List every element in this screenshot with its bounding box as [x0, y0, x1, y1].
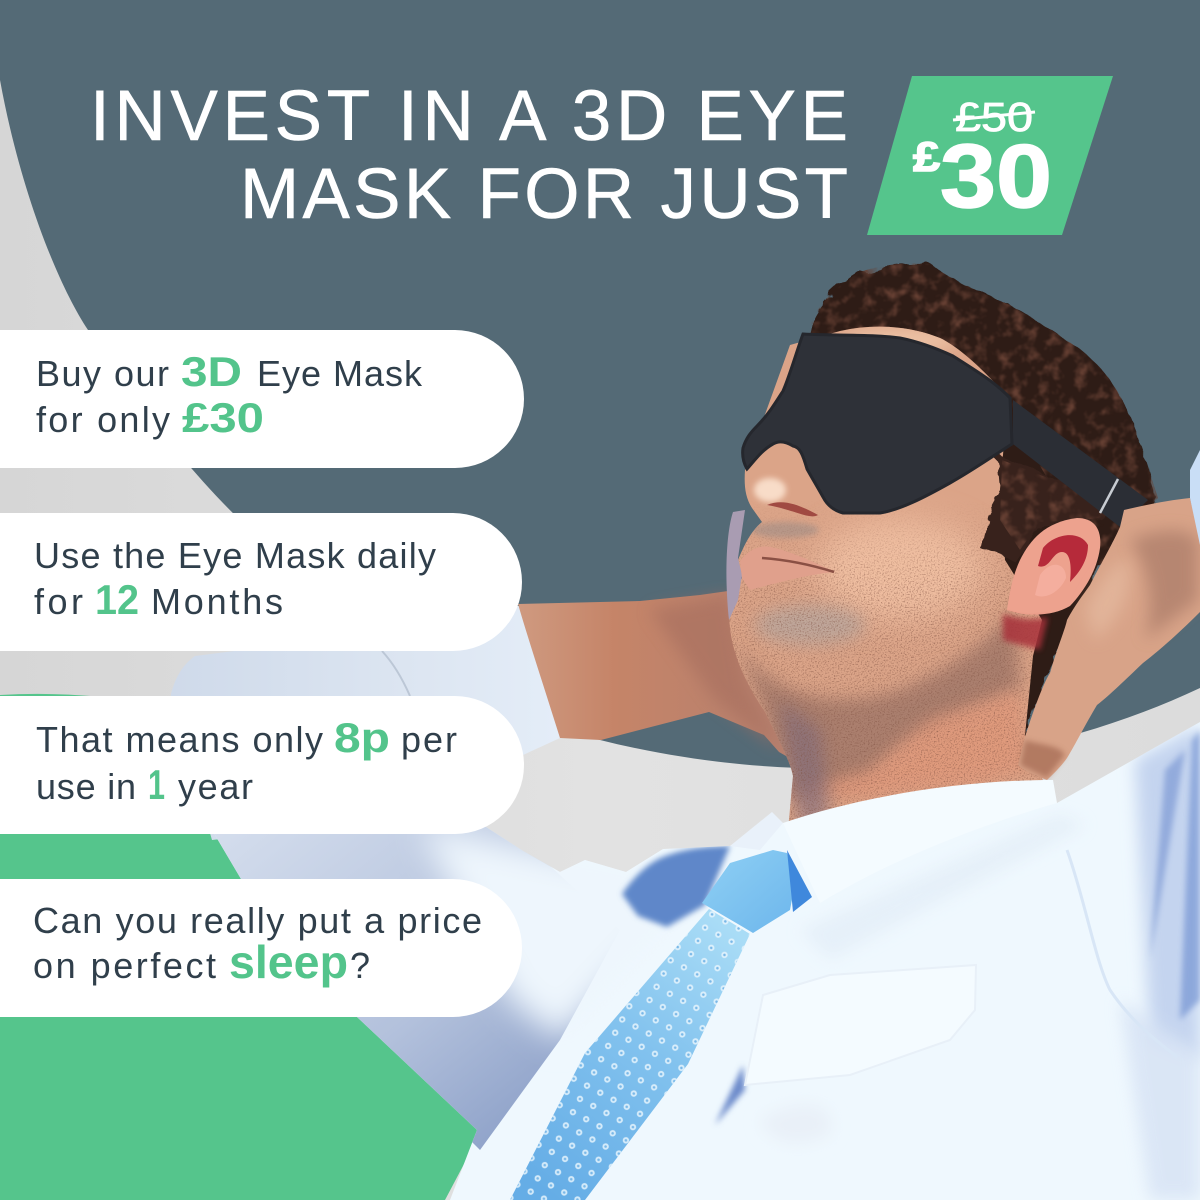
text: step 3: year — [178, 766, 253, 807]
text: step 2 — [34, 535, 436, 623]
text: step 4 — [33, 900, 482, 988]
text: step 3: use in — [36, 766, 136, 807]
price badge — [867, 76, 1113, 235]
text: step 4: sleep — [229, 936, 348, 988]
strikethrough — [953, 112, 1035, 120]
hair curls — [808, 263, 1158, 565]
right sleeve stripes — [1135, 725, 1200, 1060]
title: INVEST IN A 3D EYE — [90, 77, 848, 156]
sleeve underside — [214, 827, 596, 1150]
right hand and wrist — [1018, 498, 1200, 780]
sideburn curls — [1000, 460, 1135, 550]
new price: £ — [913, 133, 940, 180]
lips — [740, 547, 835, 590]
text: step 1: Buy our — [36, 353, 169, 394]
text: step 2: 12 — [95, 576, 139, 623]
blue shadow near collar — [622, 846, 730, 927]
text: step 1 — [36, 348, 423, 441]
collar left flap — [730, 812, 783, 850]
arm shading — [650, 595, 780, 750]
text: step 2: Months — [151, 581, 283, 622]
hand shading — [1130, 531, 1198, 640]
text: step 3: 8p — [334, 714, 390, 761]
shirt folds — [715, 1065, 745, 1125]
text: step 1: 3D — [181, 348, 242, 395]
panel: step 4 — [0, 879, 522, 1017]
text: step 3: per — [401, 719, 457, 760]
old price: £50 — [955, 94, 1033, 140]
sideburn hair — [980, 455, 1140, 562]
tie blade — [510, 909, 750, 1200]
face highlights and shadow — [815, 520, 985, 620]
title: MASK FOR JUST — [240, 155, 848, 234]
shoulder highlight — [419, 827, 620, 1050]
yoke seam — [1066, 850, 1132, 1018]
skin stubble grain — [730, 512, 1042, 821]
eye mask strap — [1013, 400, 1148, 527]
text: step 1: for only — [36, 399, 170, 440]
background: green shape — [0, 694, 482, 1200]
title — [90, 77, 848, 234]
text: step 4: on perfect — [33, 945, 216, 986]
new price: 30 — [940, 127, 1052, 227]
left arm — [518, 590, 793, 760]
3D eye mask — [743, 334, 1012, 513]
neck and face — [729, 326, 1043, 821]
right cuff — [1190, 450, 1200, 545]
collar — [783, 780, 1057, 903]
text: step 2: for — [34, 581, 83, 622]
photo: man wearing 3D eye mask — [171, 263, 1200, 1200]
text: step 4: ? — [350, 945, 370, 986]
tie knot — [702, 850, 812, 933]
shirt body — [200, 720, 1200, 1200]
text: step 1: Eye Mask — [257, 353, 423, 394]
lip line — [762, 558, 834, 572]
text: step 3: That means only — [36, 719, 323, 760]
sleeve fold line — [382, 651, 410, 696]
text: step 4: Can you really put a price — [33, 900, 482, 941]
nostril — [767, 502, 818, 516]
fingers behind face — [726, 510, 745, 620]
panel: step 3 — [0, 696, 524, 834]
hair back — [808, 263, 1158, 738]
text: step 3: 1 — [148, 761, 165, 808]
pocket flap — [745, 965, 976, 1085]
ear — [1003, 518, 1100, 650]
text: step 2: Use the Eye Mask daily — [34, 535, 436, 576]
text: step 3 — [36, 714, 457, 808]
panel: step 1 — [0, 330, 524, 468]
hand highlight — [1085, 560, 1130, 640]
left sleeve upper part — [171, 606, 560, 840]
text: step 1: £30 — [182, 394, 264, 441]
panel: step 2 — [0, 513, 522, 651]
